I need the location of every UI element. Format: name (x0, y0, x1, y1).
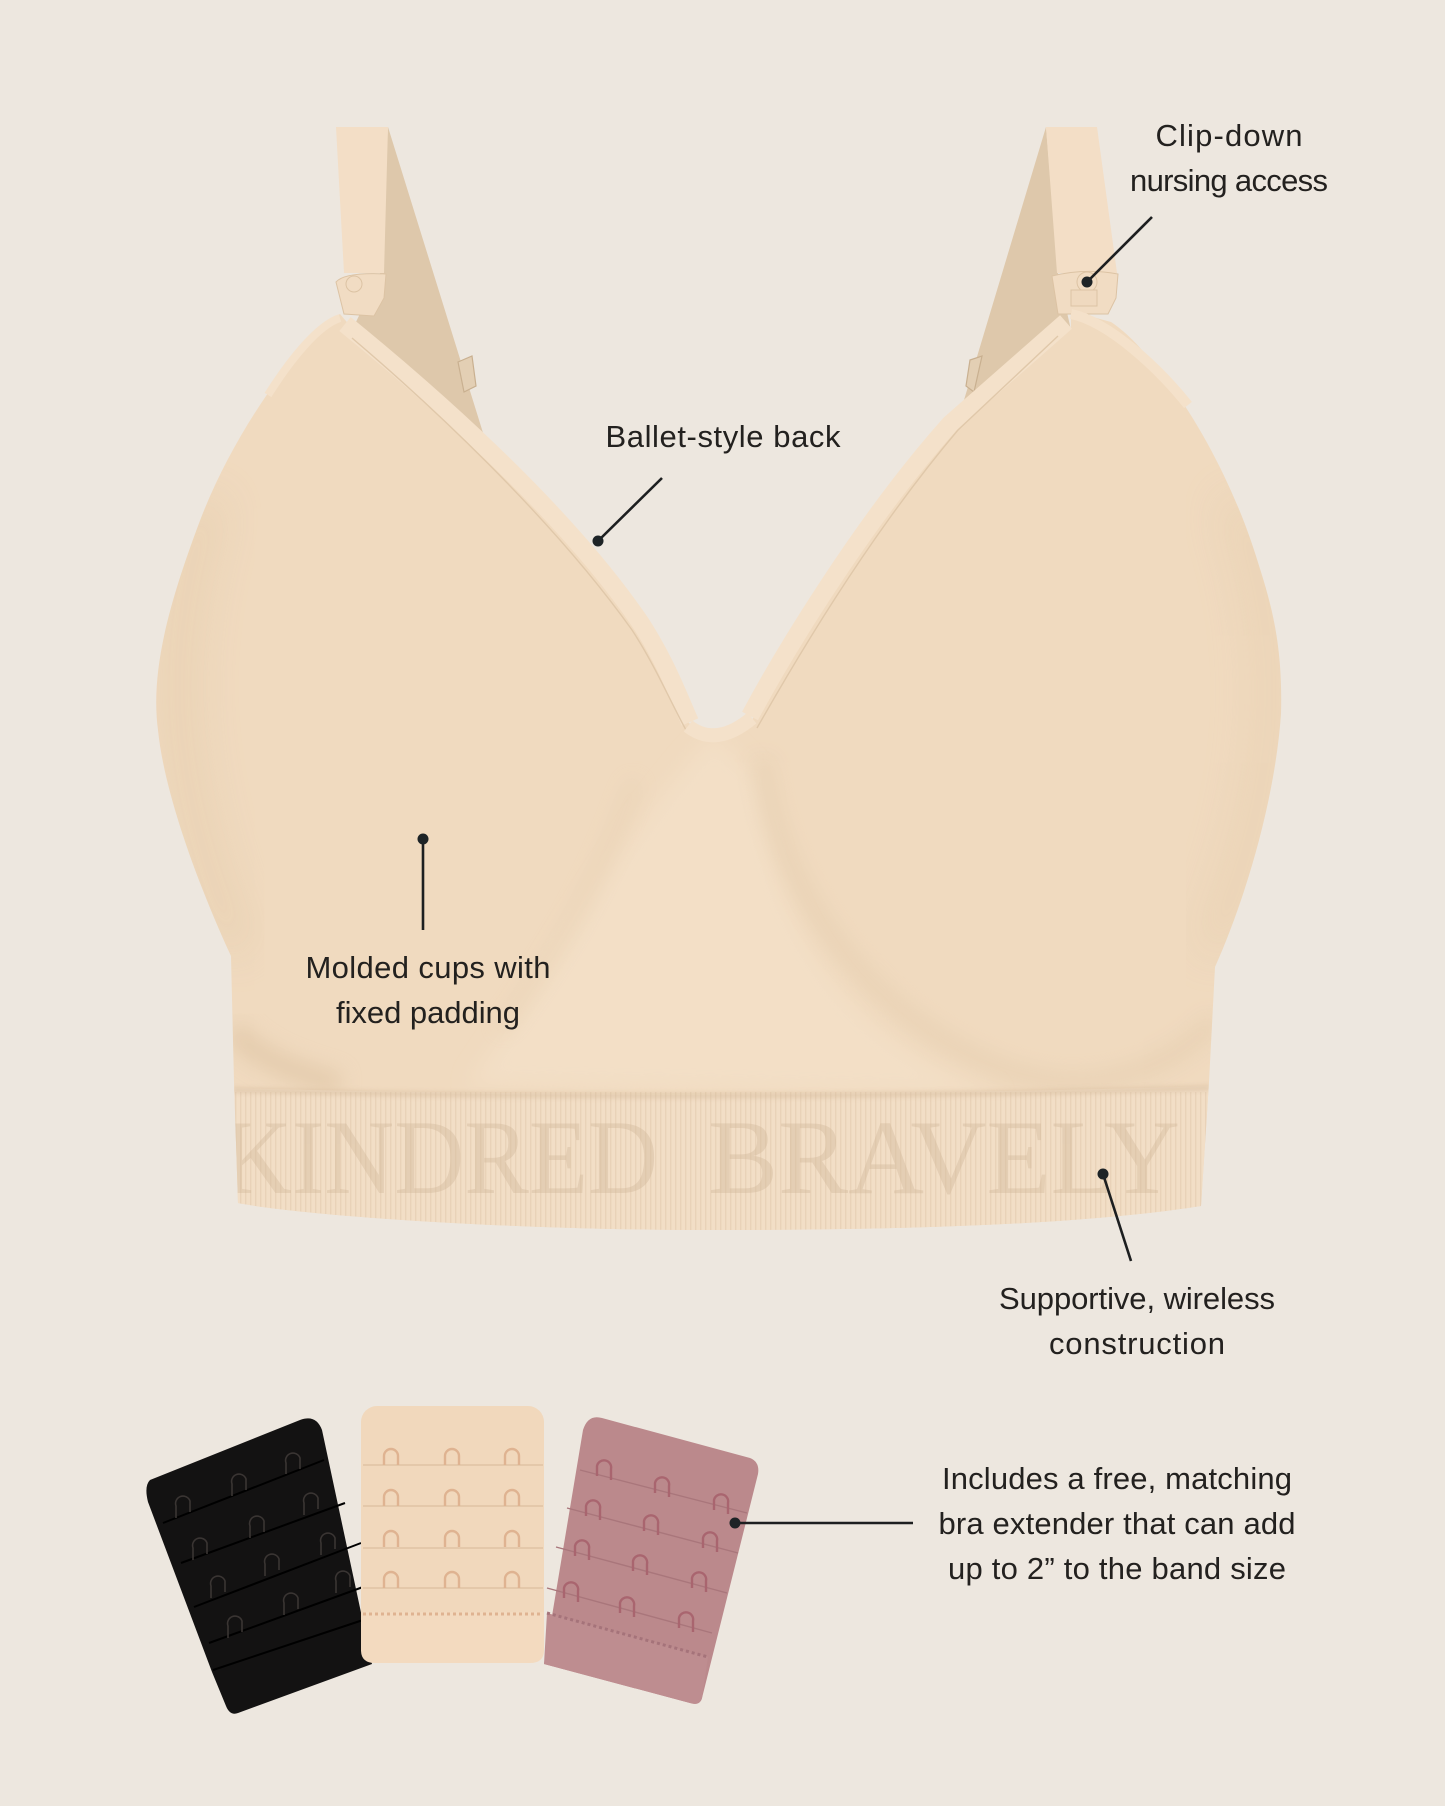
centre gore (470, 735, 1000, 1095)
bra product illustration (156, 127, 1281, 1240)
bra extender: mauve (544, 1417, 758, 1704)
shoulder edge trim left (268, 318, 340, 395)
right cup lower contour (762, 760, 1215, 1082)
callout: clip-down nursing access: nursing access (1130, 163, 1328, 198)
band ribbing (230, 1092, 1215, 1237)
callout: molded cups (306, 834, 550, 1030)
front strap left (336, 127, 388, 273)
callout: supportive wireless construction: construction (1049, 1326, 1225, 1361)
callout: free bra extender: bra extender that can add (938, 1506, 1296, 1541)
right edge shadow (1210, 500, 1270, 950)
hooks (564, 1460, 728, 1632)
callout: free bra extender (730, 1461, 1296, 1586)
left cup lower contour (500, 780, 635, 1030)
band logo text (236, 1123, 1178, 1194)
bra extender: black (146, 1418, 372, 1714)
mauve lower tab (544, 1613, 708, 1704)
beige lower tab (361, 1612, 544, 1663)
hooks (176, 1453, 350, 1638)
callout: free bra extender: up to 2” to the band size (948, 1551, 1286, 1586)
neckline trim left (345, 324, 690, 730)
left edge shadow (179, 500, 240, 950)
callout: molded cups: fixed padding (336, 995, 520, 1030)
callout: ballet-style back: Ballet-style back (606, 419, 841, 454)
back strap left (352, 127, 484, 436)
strap clip left (336, 274, 386, 316)
back strap adjuster right (966, 356, 982, 392)
callout: clip-down nursing access (1082, 118, 1328, 288)
callout: ballet-style back (592, 419, 841, 546)
lower band corner shadow left (232, 1030, 340, 1085)
back strap adjuster left (458, 356, 476, 392)
bra body (156, 311, 1281, 1230)
band logo text: KINDRED (222, 1099, 658, 1216)
strap clip right (1052, 271, 1118, 314)
callout: free bra extender: Includes a free, matching (942, 1461, 1292, 1496)
callout: supportive wireless construction (999, 1168, 1275, 1361)
callout: supportive wireless construction: Supportive, wireless (999, 1281, 1275, 1316)
band top shadow (232, 1088, 1210, 1096)
band (288, 1089, 1130, 1104)
callout: molded cups: Molded cups with (306, 950, 550, 985)
neckline trim right (688, 322, 1066, 735)
callout: clip-down nursing access: Clip-down (1156, 118, 1302, 153)
shoulder edge trim right (1071, 314, 1188, 405)
bra extender: beige (361, 1406, 544, 1663)
back strap right (955, 127, 1071, 430)
hooks (384, 1449, 519, 1588)
band logo text: BRAVELY (708, 1099, 1180, 1216)
front strap right (1046, 127, 1117, 273)
